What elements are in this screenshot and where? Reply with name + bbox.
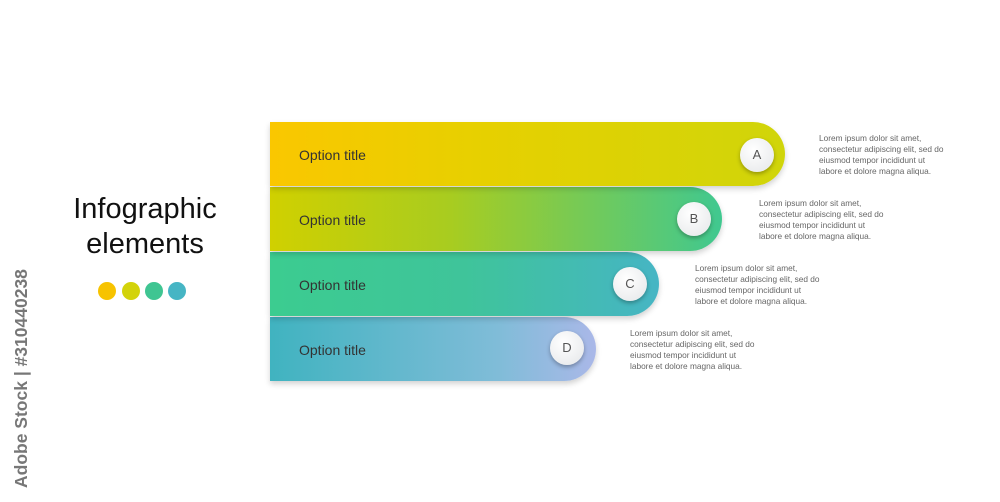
watermark: Adobe Stock | #310440238 <box>11 269 31 488</box>
text B: labore et dolore magna aliqua. <box>759 231 871 241</box>
color dots <box>98 282 186 300</box>
text B: consectetur adipiscing elit, sed do <box>759 209 884 219</box>
text C <box>695 263 820 306</box>
text B: Lorem ipsum dolor sit amet, <box>759 198 861 208</box>
bar C: Option title <box>299 277 366 293</box>
bar D: Option title <box>299 342 366 358</box>
text A <box>819 133 944 176</box>
bar B: Option title <box>299 212 366 228</box>
title: Infographic <box>73 193 217 225</box>
bar A: A <box>753 147 761 162</box>
text A: labore et dolore magna aliqua. <box>819 166 931 176</box>
bar C: C <box>625 276 635 291</box>
text C: eiusmod tempor incididunt ut <box>695 285 801 295</box>
bar A: Option title <box>299 147 366 163</box>
text A: Lorem ipsum dolor sit amet, <box>819 133 921 143</box>
text A: consectetur adipiscing elit, sed do <box>819 144 944 154</box>
title: elements <box>86 228 204 260</box>
text D: eiusmod tempor incididunt ut <box>630 350 736 360</box>
text D: consectetur adipiscing elit, sed do <box>630 339 755 349</box>
text B <box>759 198 884 241</box>
title <box>73 193 217 260</box>
text C: labore et dolore magna aliqua. <box>695 296 807 306</box>
text D: Lorem ipsum dolor sit amet, <box>630 328 732 338</box>
text D: labore et dolore magna aliqua. <box>630 361 742 371</box>
bar A <box>270 122 785 186</box>
text C: consectetur adipiscing elit, sed do <box>695 274 820 284</box>
bar B: B <box>690 211 698 226</box>
text A: eiusmod tempor incididunt ut <box>819 155 925 165</box>
bar B <box>270 187 722 251</box>
text C: Lorem ipsum dolor sit amet, <box>695 263 797 273</box>
bar D: D <box>562 340 572 355</box>
text D <box>630 328 755 371</box>
bar C <box>270 252 659 316</box>
bar D <box>270 317 596 381</box>
text B: eiusmod tempor incididunt ut <box>759 220 865 230</box>
